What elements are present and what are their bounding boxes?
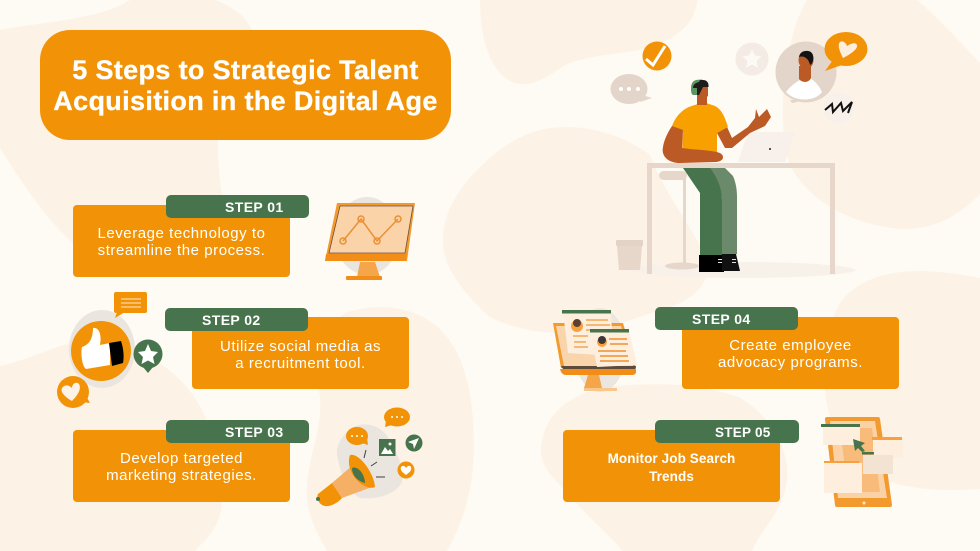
step 02 card: Utilize social media as	[220, 338, 381, 355]
step 01 tab	[166, 195, 309, 218]
icon: star badge	[736, 42, 768, 76]
step 05 card	[563, 430, 780, 502]
icon: chat dots bubble	[610, 74, 652, 104]
step 01 card: streamline the process.	[98, 242, 265, 259]
step 05 card: Trends	[649, 469, 694, 484]
illustration: person at desk with laptop	[616, 80, 855, 278]
step 04 tab: STEP 04	[692, 311, 751, 327]
step 03 card	[73, 430, 290, 502]
step 02 card: a recruitment tool.	[235, 355, 366, 372]
step 03 card: marketing strategies.	[106, 467, 257, 484]
title: 5 Steps to Strategic Talent	[72, 55, 419, 85]
step 01 card: Leverage technology to	[97, 225, 266, 242]
step 04 card: advocacy programs.	[718, 354, 863, 371]
icon: avatar bubble	[776, 42, 836, 103]
step 05 card: Monitor Job Search	[608, 451, 735, 466]
icon: zigzag waveform badge	[824, 92, 854, 124]
step 03 card: Develop targeted	[120, 450, 243, 467]
step 05 tab	[655, 420, 799, 443]
step 04 card	[682, 317, 899, 389]
step 03 tab: STEP 03	[225, 424, 284, 440]
step 03 tab	[166, 420, 309, 443]
icon: monitor with profile cards	[553, 308, 637, 392]
stool	[659, 171, 687, 266]
legs	[710, 168, 737, 254]
step 02 card	[192, 317, 409, 389]
step 04 card: Create employee	[729, 337, 852, 354]
step 01 card	[73, 205, 290, 277]
title: Acquisition in the Digital Age	[53, 86, 438, 116]
step 02 tab	[165, 308, 308, 331]
trash bin	[616, 240, 643, 270]
torso	[672, 103, 728, 154]
front arm	[663, 126, 723, 163]
step 04 tab	[655, 307, 798, 330]
step 02 tab: STEP 02	[202, 312, 261, 328]
icon: megaphone with social icons	[316, 408, 422, 506]
icon: tablet with windows and cursor	[821, 419, 903, 505]
icon: check badge	[642, 42, 672, 70]
neck and head	[691, 80, 709, 105]
step 05 tab: STEP 05	[715, 425, 771, 440]
icon: monitor with line chart	[325, 197, 415, 280]
shoes	[699, 255, 724, 272]
arm back and hand	[717, 109, 771, 148]
laptop	[738, 132, 795, 162]
icon: heart speech bubble	[824, 32, 868, 71]
title	[40, 30, 451, 140]
icon: thumbs up with social bubbles	[57, 292, 162, 408]
desk	[647, 163, 835, 274]
step 01 tab: STEP 01	[225, 199, 284, 215]
